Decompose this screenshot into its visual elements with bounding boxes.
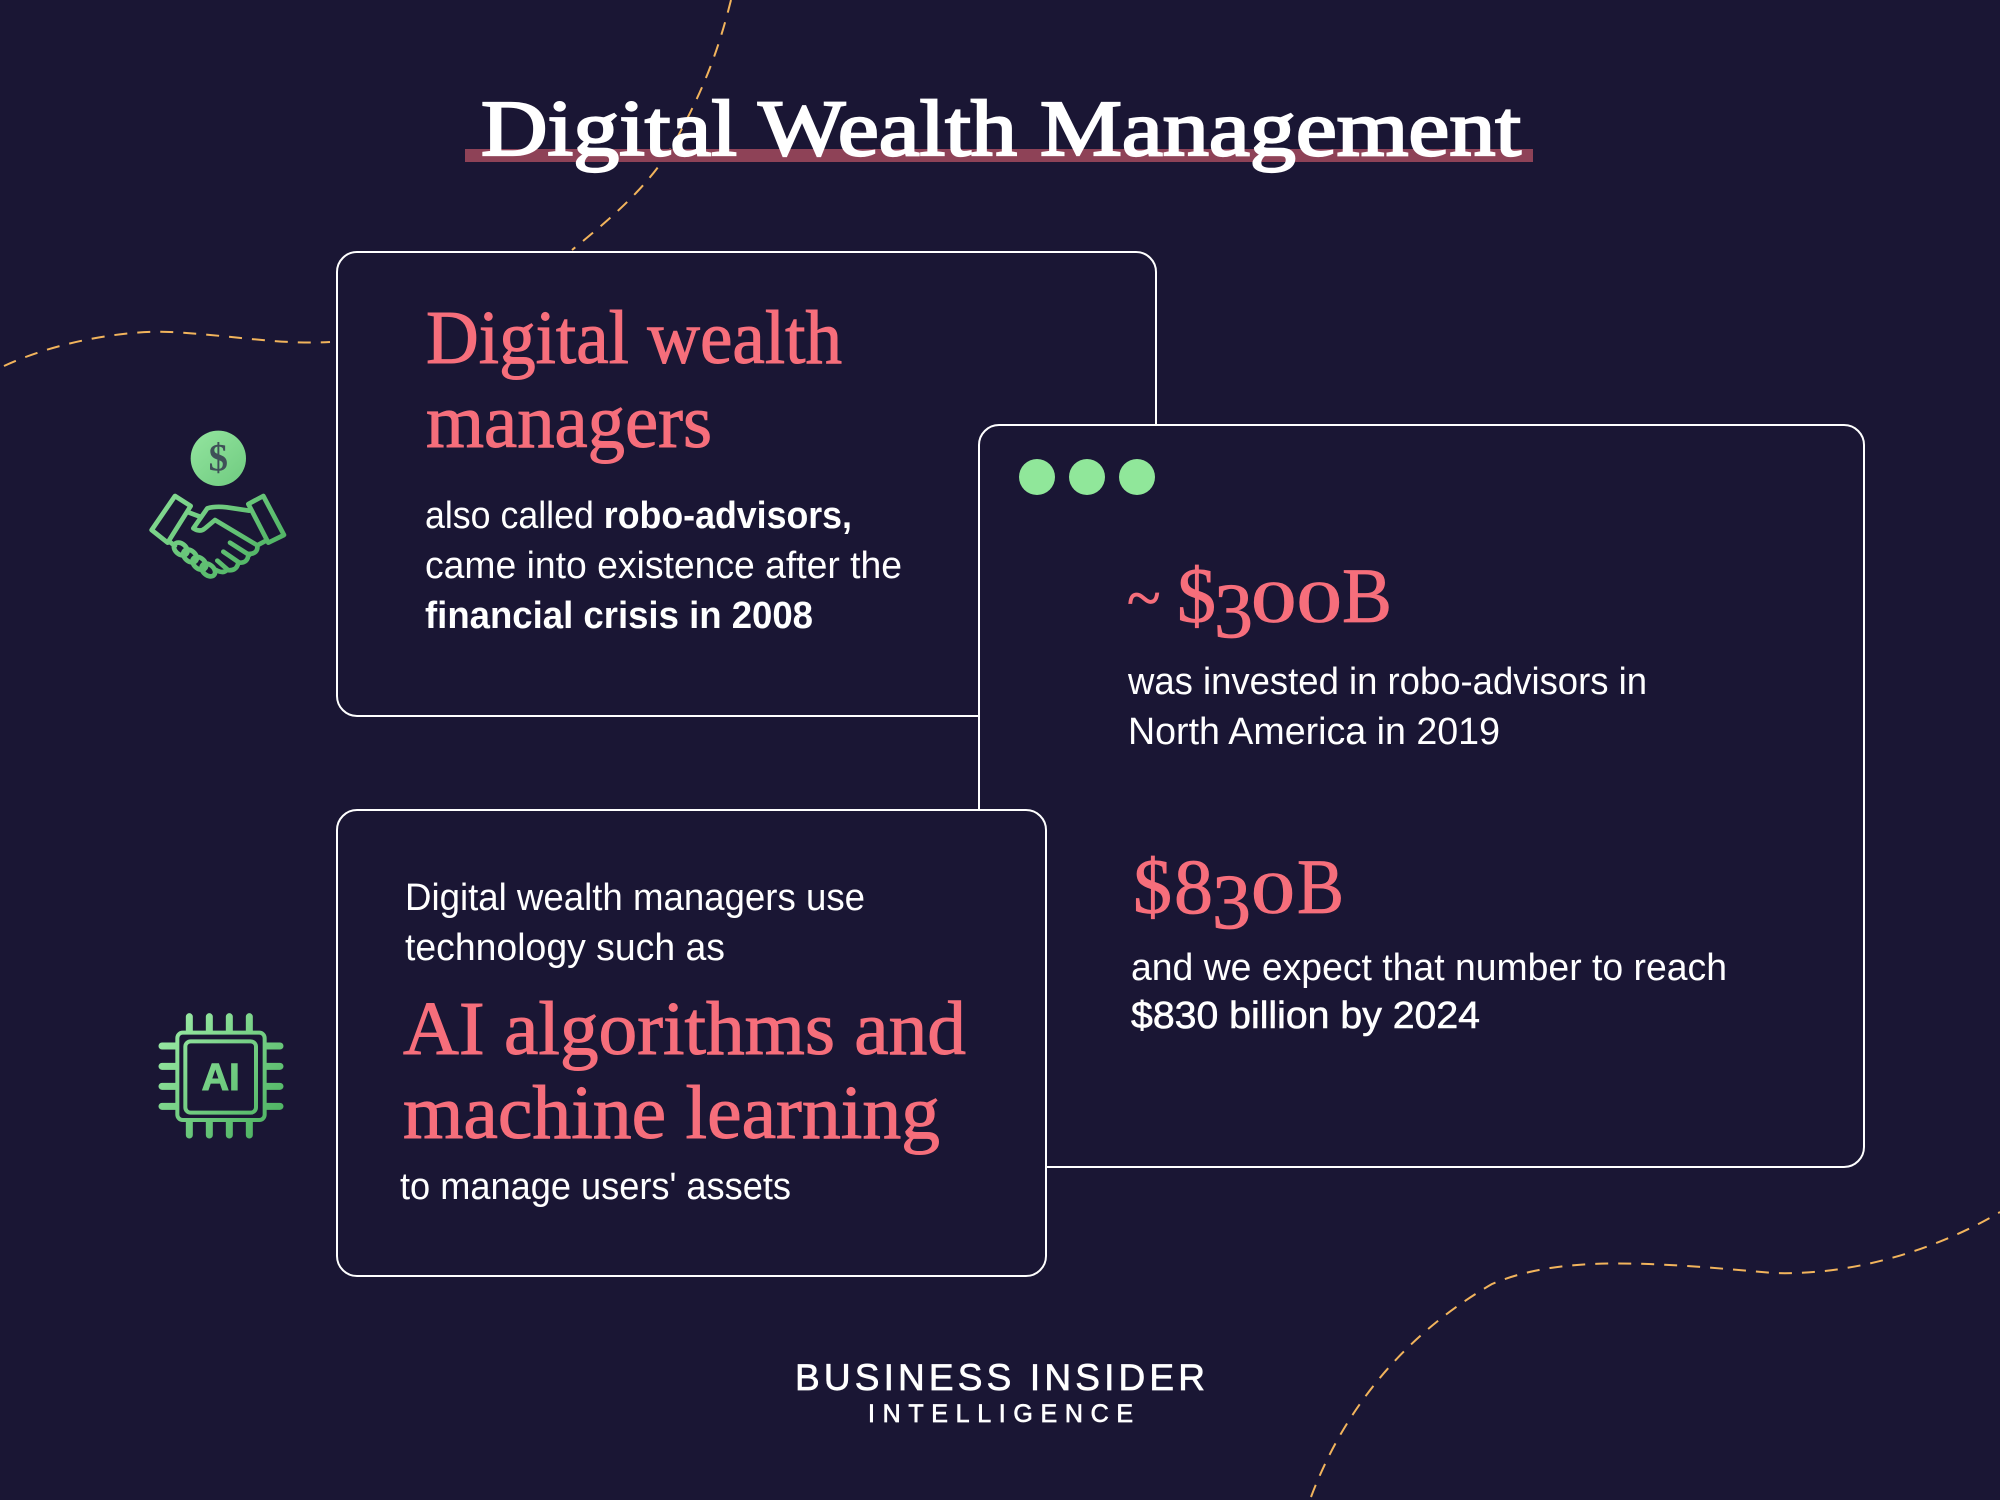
icon: AI chip: AI <box>202 1057 240 1099</box>
text: robo-advisors description: also called robo-advisors, <box>425 495 852 537</box>
stat: 830B: $ <box>1133 843 1172 930</box>
stat: 300B: B <box>1342 552 1392 639</box>
text: expected 2024: and we expect that number to reach <box>1131 947 1727 989</box>
heading: digital wealth managers: Digital wealth <box>426 296 842 380</box>
panel: investment figures <box>979 425 1864 1167</box>
stat: 830B: 3 <box>1212 858 1251 945</box>
heading: AI algorithms and machine learning: machine learning <box>403 1071 940 1155</box>
text: expected 2024 <box>1131 947 1727 1037</box>
logo: Business Insider Intelligence: INTELLIGENCE <box>868 1400 1133 1428</box>
text: invested in 2019 <box>1127 661 1647 753</box>
text: intro: Digital wealth managers use <box>405 877 865 919</box>
text: intro: technology such as <box>405 927 725 969</box>
heading: digital wealth managers <box>426 296 842 464</box>
icon: handshake with dollar coin <box>152 431 284 579</box>
window dots <box>1019 459 1155 495</box>
stat: 830B: 8 <box>1174 843 1213 930</box>
heading: AI algorithms and machine learning: AI algorithms and <box>403 987 966 1071</box>
text: invested in 2019: North America in 2019 <box>1128 711 1500 753</box>
stat: 300B: $ <box>1177 552 1216 639</box>
icon: AI chip <box>162 1017 280 1135</box>
icon: handshake with dollar coin: $ <box>209 438 228 480</box>
panel: digital wealth managers <box>337 252 1156 716</box>
text: robo-advisors description: financial crisis in 2008 <box>425 595 813 637</box>
title: Digital Wealth Management <box>481 86 1521 173</box>
text: robo-advisors description <box>425 495 902 637</box>
panel: AI algorithms <box>337 810 1046 1276</box>
logo: Business Insider Intelligence: BUSINESS INSIDER <box>795 1357 1205 1398</box>
stat: 300B: 3 <box>1214 567 1253 654</box>
text: manage assets: to manage users' assets <box>400 1166 791 1208</box>
text: intro <box>405 877 865 969</box>
stat: 300B: 00 <box>1251 569 1342 635</box>
text: expected 2024: $830 billion by 2024 <box>1131 995 1480 1037</box>
heading: AI algorithms and machine learning <box>403 987 966 1155</box>
text: robo-advisors description: came into existence after the <box>425 545 902 587</box>
stat: 300B: ~ <box>1127 565 1161 633</box>
stat: 830B: B <box>1297 843 1344 930</box>
heading: digital wealth managers: managers <box>426 380 712 464</box>
text: invested in 2019: was invested in robo-advisors in <box>1127 661 1647 703</box>
logo: Business Insider Intelligence <box>795 1357 1205 1428</box>
stat: 830B: 0 <box>1251 860 1295 926</box>
